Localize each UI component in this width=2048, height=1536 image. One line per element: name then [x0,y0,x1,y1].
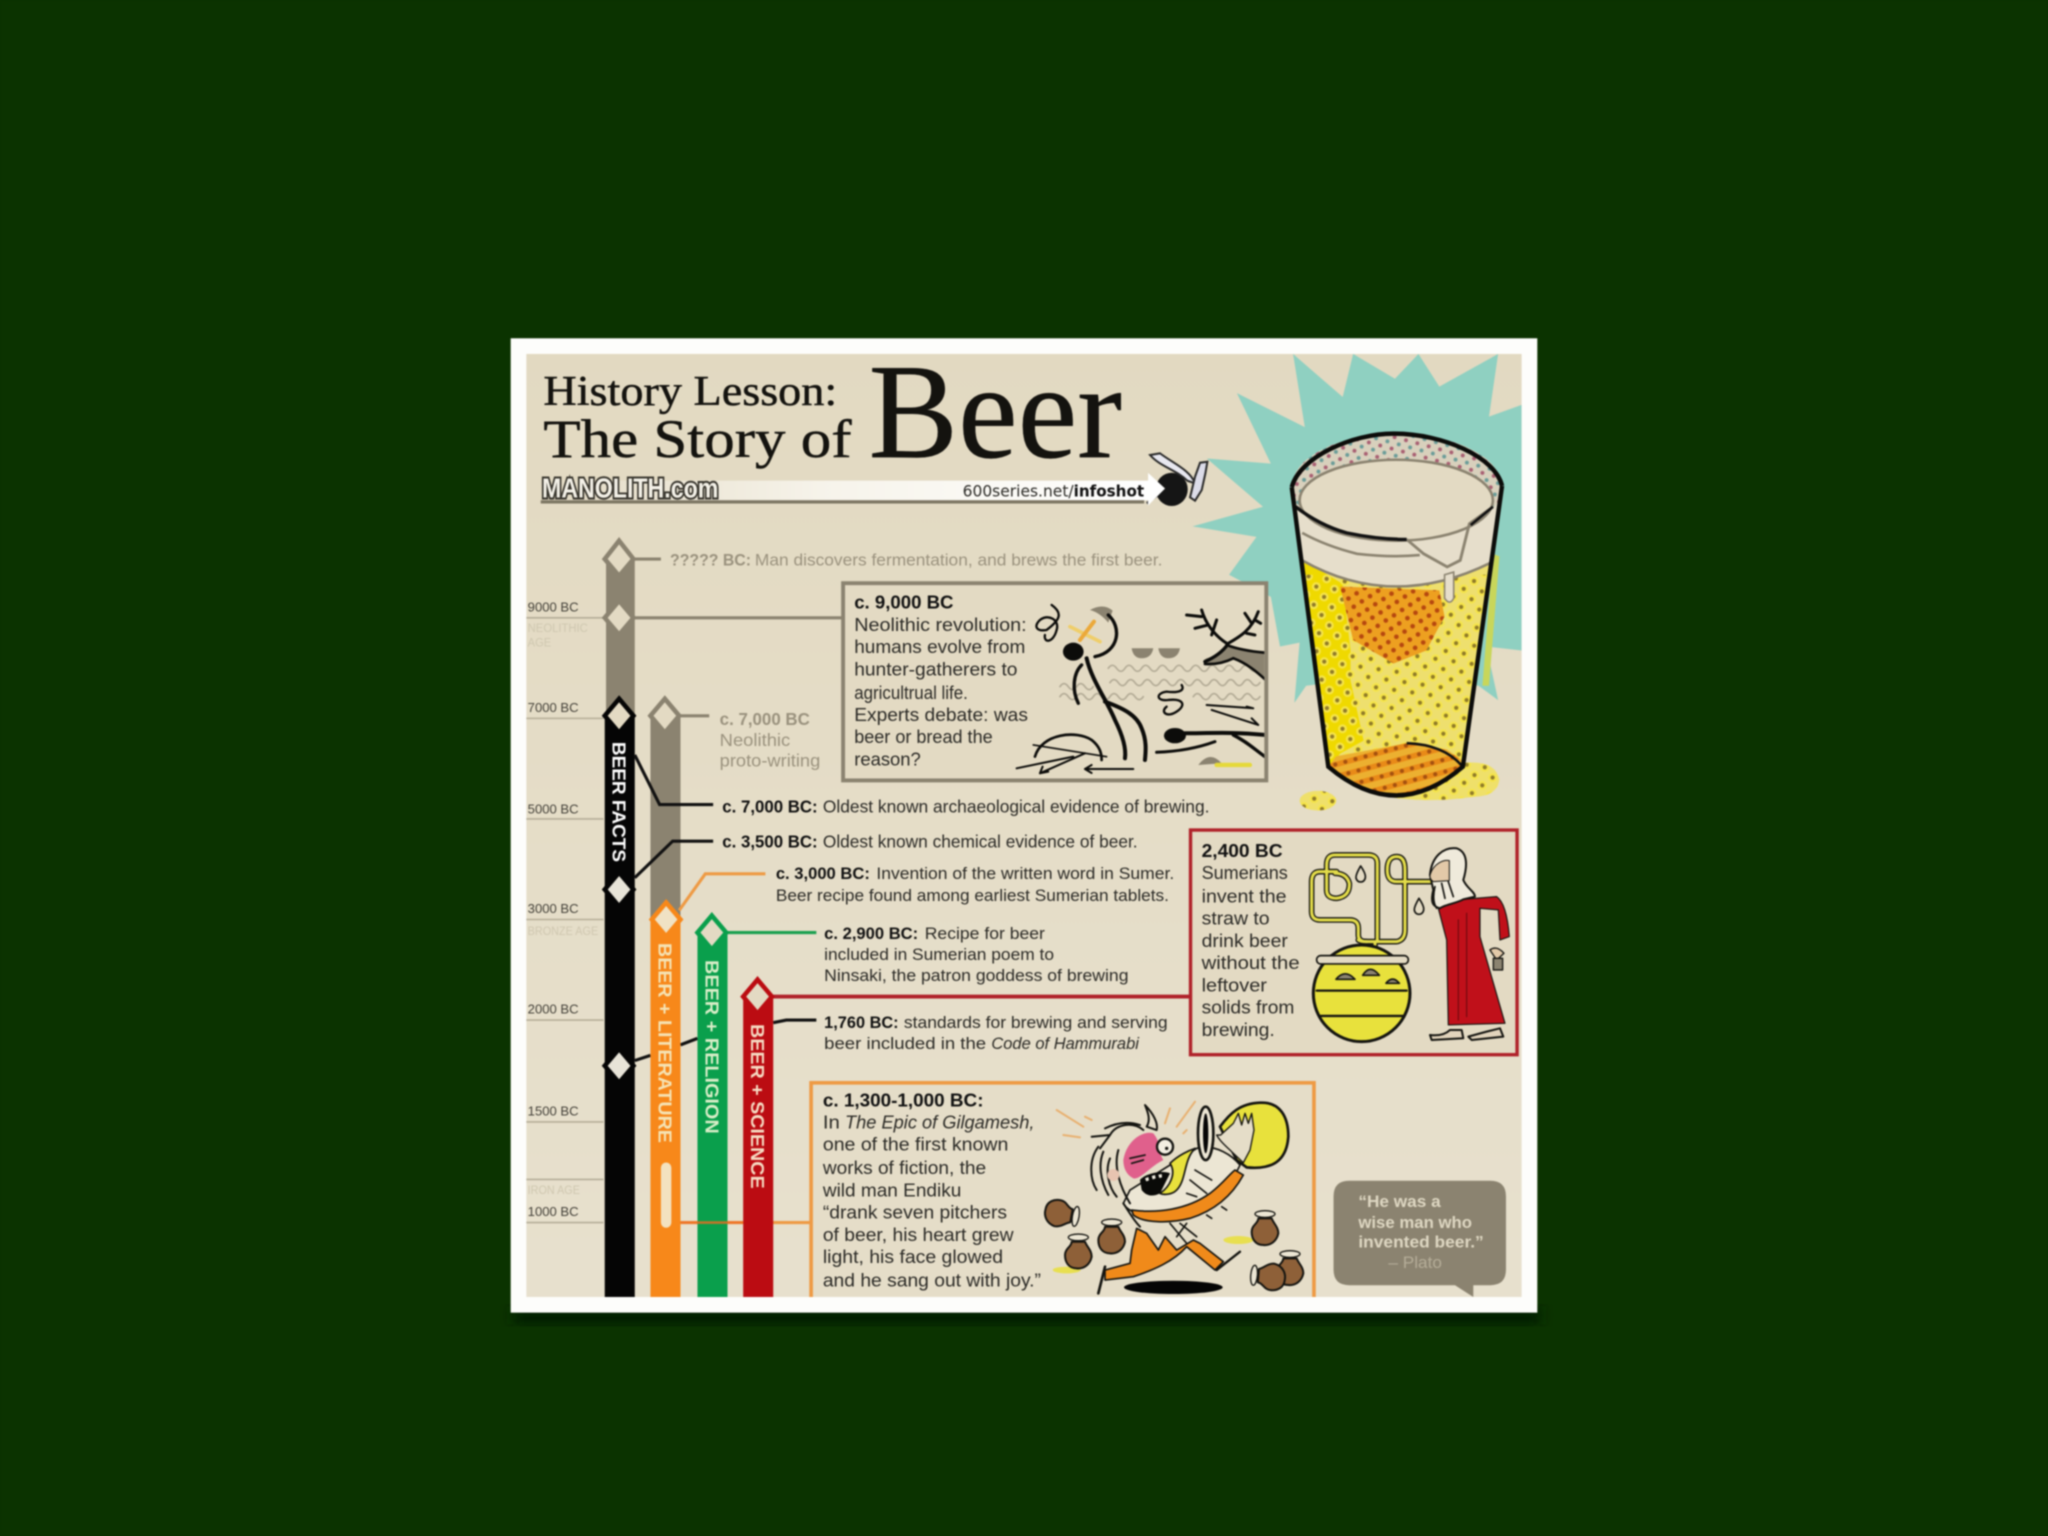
title [543,337,1122,487]
quote bubble: invented beer.” [1358,1233,1484,1251]
timeline bar: beer + science: BEER + SCIENCE [747,1024,768,1189]
panel: 9,000 BC [843,583,1266,780]
illustration: Endiku drinking [1043,1102,1303,1294]
panel: 9,000 BC: Experts debate: was [854,704,1028,725]
timeline bar: beer + religion [697,916,728,1297]
panel: Gilgamesh: In [823,1111,840,1132]
panel: 9,000 BC: humans evolve from [854,636,1025,657]
panel: 2,400 BC [1191,830,1517,1055]
quote bubble: “He was a [1358,1193,1442,1211]
text: 2,900 BC poem: c. 2,900 BC: [824,924,918,943]
text: 1,760 BC Hammurabi: Code of Hammurabi [991,1034,1140,1053]
date axis: 9000 BC [528,599,579,614]
cave painting illustration [1017,605,1265,773]
panel: Gilgamesh [811,1083,1314,1297]
icon: 600series rocket ball [1147,453,1207,506]
text: proto-writing: proto-writing [720,751,820,771]
date axis: NEOLITHIC [528,622,588,635]
quote bubble: – Plato [1388,1254,1442,1272]
illustration: beer glass [1292,434,1502,816]
text: 7,000 BC brewing evidence: c. 7,000 BC: [722,796,818,816]
text: proto-writing: c. 7,000 BC [720,709,810,729]
panel: 9,000 BC: agricultrual life. [854,682,968,703]
date axis: 3000 BC [528,901,579,916]
date axis: 7000 BC [528,700,579,715]
text: 1,760 BC Hammurabi: standards for brewing and serving [904,1013,1168,1032]
title: The Story of [543,409,852,469]
text: proto-writing [720,709,820,771]
text: 1,760 BC Hammurabi: beer included in the [824,1034,986,1053]
timeline bar: proto-writing [650,699,680,920]
panel: 2,400 BC: leftover [1202,974,1267,995]
text: first beer: ????? BC: [670,551,751,570]
beer liquid [1303,562,1490,794]
panel: 2,400 BC: straw to [1202,908,1270,929]
panel: 2,400 BC: drink beer [1202,930,1288,951]
panel: 9,000 BC: Neolithic revolution: [854,614,1027,635]
link banner: 600series.net/ [963,481,1074,500]
timeline bar: beer + literature: BEER + LITERATURE [654,943,675,1143]
link banner: infoshot [1074,481,1144,500]
text: 3,000 BC written word: c. 3,000 BC: [776,864,870,883]
starburst behind glass [1192,354,1522,703]
link banner [541,473,1165,505]
panel: 2,400 BC: invent the [1202,886,1287,907]
foam halftone rim [1292,434,1502,541]
text: 3,000 BC written word: Invention of the written word in Sumer. [876,864,1174,883]
panel: 2,400 BC: solids from [1202,997,1294,1018]
text: 1,760 BC Hammurabi [824,1013,1168,1053]
text: 3,000 BC written word [776,864,1174,905]
text: proto-writing: Neolithic [720,730,790,750]
MANOLITH logo text: MANOLITH.com [542,473,718,504]
date axis [526,599,603,1223]
text: first beer: Man discovers fermentation, and brews the first beer. [755,551,1162,570]
panel: Gilgamesh: light, his face glowed [823,1246,1003,1267]
date axis: BRONZE AGE [528,925,598,938]
panel: Gilgamesh: The Epic of Gilgamesh, [845,1111,1034,1132]
panel: 2,400 BC: Sumerians [1202,862,1288,883]
quote bubble: wise man who [1357,1214,1472,1232]
panel: Gilgamesh: c. 1,300-1,000 BC: [823,1089,984,1110]
panel: 9,000 BC: beer or bread the [854,726,993,747]
timeline bar: beer + religion: BEER + RELIGION [701,960,722,1134]
timeline bar: beer + literature [650,903,680,1297]
orange crossing line over bars [680,1222,743,1224]
quote bubble [1334,1181,1506,1297]
white card [511,338,1537,1313]
panel: 9,000 BC: c. 9,000 BC [854,592,953,613]
text: 7,000 BC brewing evidence: Oldest known archaeological evidence of brewing. [823,796,1209,816]
panel: 9,000 BC: reason? [854,748,921,769]
date axis: AGE [528,637,551,650]
panel: Gilgamesh: “drank seven pitchers [823,1202,1007,1223]
panel: Gilgamesh: one of the first known [823,1134,1008,1155]
panel: 9,000 BC: hunter-gatherers to [854,658,1017,679]
date axis: 2000 BC [528,1002,579,1017]
title: History Lesson: [543,369,837,415]
card shadow [513,1306,1540,1324]
date axis: 5000 BC [528,802,579,817]
text: 1,760 BC Hammurabi: 1,760 BC: [824,1013,899,1032]
panel: 2,400 BC: without the [1201,952,1300,973]
panel: Gilgamesh: and he sang out with joy.” [823,1270,1041,1291]
text: 3,500 BC chemical evidence: c. 3,500 BC: [722,832,818,852]
infographic: The Story of Beer [510,337,1542,1326]
timeline bar: beer + science [743,980,773,1297]
title: Beer [869,337,1122,487]
text: 2,900 BC poem: Ninsaki, the patron goddess of brewing [824,966,1128,985]
date axis: IRON AGE [528,1184,580,1197]
panel: 2,400 BC: brewing. [1202,1019,1275,1040]
text: 2,900 BC poem: Recipe for beer [925,924,1045,943]
illustration: Sumerian figure [1430,848,1509,1040]
date axis: 1500 BC [528,1103,579,1118]
beige panel [526,354,1522,1297]
timeline bar: beer facts [605,541,635,1297]
timeline bar: beer facts: BEER FACTS [609,742,630,862]
panel: Gilgamesh: works of fiction, the [822,1157,986,1178]
panel: 2,400 BC: 2,400 BC [1202,840,1283,861]
panel: Gilgamesh: of beer, his heart grew [823,1224,1014,1245]
text: 2,900 BC poem: included in Sumerian poem to [824,945,1054,964]
connector lines [635,559,1190,1223]
panel: Gilgamesh: wild man Endiku [822,1179,961,1200]
illustration: straw tubes and pot [1312,848,1509,1042]
text: 3,500 BC chemical evidence: Oldest known chemical evidence of beer. [823,832,1138,852]
text: 2,900 BC poem [824,924,1128,985]
date axis: 1000 BC [528,1204,579,1219]
spilled beer puddles [1300,762,1499,810]
text: 3,000 BC written word: Beer recipe found among earliest Sumerian tablets. [776,886,1169,905]
